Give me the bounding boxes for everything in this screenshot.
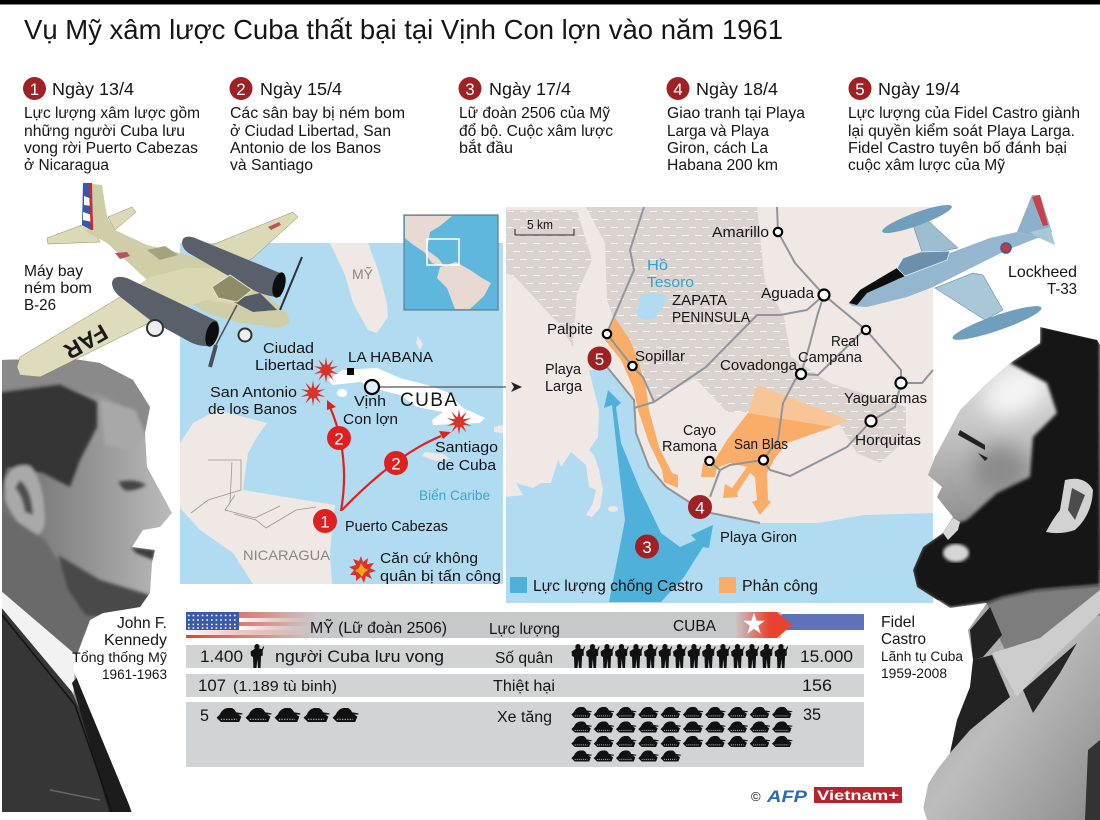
- step badges on map: 4: [695, 498, 705, 518]
- step 2: 2: [236, 80, 246, 99]
- row: losses: [186, 674, 864, 697]
- step 4: Habana 200 km: [667, 157, 778, 174]
- place labels: ZAPATA: [672, 292, 727, 309]
- row: tanks: Xe tăng: [497, 709, 552, 726]
- map legend: Lực lượng chống Castro: [533, 578, 703, 595]
- step 5: cuộc xâm lược của Mỹ: [848, 157, 1005, 174]
- step badges on map: [588, 346, 712, 558]
- caption: Castro: [881, 614, 963, 681]
- row: tanks: 35: [803, 705, 821, 724]
- step 2: và Santiago: [230, 157, 313, 174]
- step 1: Lực lượng xâm lược gồm: [24, 105, 200, 122]
- map labels: Santiago: [435, 439, 498, 456]
- arrow head to detail map: [511, 382, 522, 392]
- place labels: Playa Giron: [720, 529, 797, 546]
- caption: Kennedy: 1961-1963: [102, 667, 167, 682]
- step 1: vong rời Puerto Cabezas: [24, 140, 198, 157]
- step 1: Ngày 13/4: [52, 79, 134, 99]
- propellers: [280, 257, 302, 310]
- wheels: [147, 320, 163, 336]
- step 1: 1: [30, 80, 39, 99]
- map legend: [510, 577, 818, 595]
- caption: Castro: 1959-2008: [881, 666, 947, 681]
- row: troops: người Cuba lưu vong: [275, 647, 444, 666]
- neck: [987, 585, 1100, 650]
- Lake Tesoro: [637, 293, 667, 320]
- caption: Castro: Lãnh tụ Cuba: [881, 649, 963, 664]
- collar shadow: [950, 607, 1010, 753]
- map labels: Puerto Cabezas: [345, 518, 448, 535]
- plane label: B-26: B-26: [24, 297, 56, 314]
- map labels: Vịnh: [354, 393, 386, 410]
- place labels: Aguada: [761, 285, 815, 302]
- map labels: San Antonio: [210, 384, 297, 401]
- roundel: [1001, 243, 1011, 253]
- step 1: [23, 77, 200, 174]
- burst: Ciudad Libertad: [314, 357, 338, 383]
- burst: San Antonio: [301, 380, 325, 406]
- step badges on map: 5: [595, 350, 604, 369]
- place labels: Yaguaramas: [844, 390, 927, 407]
- header row: MỸ (Lữ đoàn 2506): [310, 617, 447, 637]
- timeline: five steps: [23, 77, 1080, 174]
- map labels: Libertad: [255, 357, 314, 374]
- caption: Kennedy: Tổng thống Mỹ: [72, 650, 167, 665]
- step 5: lại quyền kiểm soát Playa Larga.: [848, 123, 1075, 140]
- step 3: 3: [465, 80, 475, 99]
- tie: [72, 678, 132, 812]
- map labels: Con lợn: [343, 411, 398, 428]
- step 5: Lực lượng của Fidel Castro giành: [848, 105, 1080, 122]
- panel: detail map of Bay of Pigs: [506, 207, 933, 603]
- place labels: Tesoro: [647, 274, 694, 291]
- route badges: 2: [391, 454, 401, 474]
- credit: AFP and Vietnam+: [751, 787, 902, 806]
- head: [0, 355, 175, 815]
- step 2: Antonio de los Banos: [230, 140, 381, 157]
- row: troops: Số quân: [495, 650, 553, 667]
- row: losses: 107: [198, 676, 226, 695]
- map labels: NICARAGUA: [243, 547, 331, 563]
- town markers: [603, 228, 906, 465]
- caption: Kennedy: Kennedy: [104, 632, 167, 649]
- row: tanks: 5: [200, 706, 209, 725]
- portrait: Fidel Castro: [905, 325, 1100, 820]
- temple shadow: [100, 401, 146, 445]
- place labels: Sopillar: [635, 348, 685, 365]
- route badges: 1: [320, 512, 330, 532]
- row: troops: [186, 644, 864, 668]
- silver hair: [0, 355, 152, 436]
- header row: CUBA: [673, 618, 716, 635]
- US flag canton: [186, 612, 239, 630]
- portrait: John F. Kennedy: [0, 355, 175, 815]
- red attack routes: [330, 407, 441, 511]
- near wing: [935, 273, 1003, 320]
- fuselage: [849, 232, 1040, 307]
- Cuba island: [328, 368, 485, 425]
- caption: Kennedy: [72, 615, 167, 682]
- row: troops: 1.400: [200, 647, 243, 666]
- neck and jaw shadow: [14, 524, 96, 664]
- tail fin: [82, 183, 115, 232]
- row: losses: 156: [802, 676, 832, 695]
- place labels: Cayo: [683, 422, 716, 439]
- Central America land: [180, 410, 335, 584]
- step 5: [848, 77, 1080, 174]
- comparison table: [186, 612, 864, 767]
- canopy: [897, 251, 950, 276]
- far wing: [197, 212, 298, 267]
- eye and mouth shadows: [118, 481, 146, 490]
- collar: [992, 590, 1100, 697]
- step 2: [230, 77, 405, 174]
- Cuba flag: [781, 614, 864, 630]
- step 4: [666, 77, 805, 174]
- fuselage: [83, 230, 290, 328]
- connector to detail map: [379, 386, 512, 388]
- step 4: 4: [673, 80, 683, 99]
- place labels: Campana: [798, 349, 863, 366]
- burst: Santiago: [447, 409, 471, 435]
- cockpit: [212, 275, 252, 302]
- map labels: de los Banos: [208, 401, 297, 418]
- step 5: Ngày 19/4: [878, 79, 960, 99]
- place labels: Real: [831, 333, 859, 350]
- eye and brow: [958, 430, 988, 461]
- map labels: LA HABANA: [348, 349, 433, 366]
- step 1: ở Nicaragua: [24, 157, 109, 174]
- place labels: Covadonga: [720, 357, 798, 374]
- step 2: Ngày 15/4: [260, 79, 342, 99]
- legend: bombed airbase: Căn cứ không: [380, 550, 478, 567]
- map legend: Phản công: [742, 578, 818, 595]
- far tip tank: [880, 200, 954, 238]
- swamp areas: [506, 207, 906, 463]
- place labels: Horquitas: [855, 432, 921, 449]
- step 4: Giao tranh tại Playa: [667, 105, 805, 122]
- map labels: MỸ: [352, 266, 374, 282]
- near wing with FAR marking: [17, 293, 168, 377]
- near tip tank: [950, 301, 1044, 345]
- near wing with FAR marking: FAR: [59, 319, 112, 365]
- credit: AFP and Vietnam+: Vietnam+: [817, 787, 899, 803]
- face shading: [972, 356, 1055, 494]
- title: Vụ Mỹ xâm lược Cuba thất bại tại Vịnh Con lợn vào năm 1961: [24, 14, 783, 45]
- credit: AFP and Vietnam+: AFP: [766, 787, 808, 806]
- near engine: [112, 277, 219, 346]
- place labels: [545, 224, 927, 546]
- credit: AFP and Vietnam+: ©: [751, 789, 761, 804]
- nose: [849, 268, 905, 305]
- place labels: Palpite: [547, 321, 593, 338]
- scale bar: 5 km: [527, 218, 553, 232]
- face base: [905, 340, 1100, 600]
- step 3: [458, 77, 613, 157]
- road network: [607, 207, 933, 523]
- step 3: Ngày 17/4: [489, 79, 571, 99]
- step 1: những người Cuba lưu: [24, 123, 185, 140]
- tail fin: [1017, 195, 1052, 237]
- landing force arrow: [604, 390, 713, 602]
- inset locator map: [404, 215, 498, 310]
- map labels: Biển Caribe: [419, 487, 490, 503]
- ear: [5, 465, 45, 535]
- collar: [0, 590, 76, 700]
- map labels: [208, 266, 498, 563]
- Bay of Pigs marker: [365, 380, 379, 394]
- step 2: Các sân bay bị ném bom: [230, 105, 405, 122]
- hair, back of head and beard: [913, 325, 1100, 608]
- US flag stripes: [186, 612, 316, 638]
- icon: T-33 jet: [849, 195, 1055, 345]
- panel: regional map of the Caribbean: [180, 215, 512, 585]
- Florida: [330, 243, 388, 333]
- soldier icons: [572, 644, 788, 668]
- row: tanks: [186, 702, 864, 767]
- far engine: [182, 237, 284, 297]
- place labels: Amarillo: [712, 224, 769, 241]
- ear: [1046, 479, 1093, 533]
- place labels: Ramona: [662, 438, 718, 455]
- plane label: B-26: [24, 263, 92, 314]
- plane label: Lockheed T-33: Lockheed: [1008, 264, 1077, 281]
- shirt edge shadow: [1085, 740, 1100, 820]
- plane label: B-26: ném bom: [24, 280, 92, 297]
- step 4: Larga và Playa: [667, 123, 769, 140]
- caption: Castro: Fidel: [881, 614, 915, 631]
- dark hair: [0, 384, 97, 500]
- scale bar: [515, 218, 574, 235]
- stabilizers: [47, 225, 100, 244]
- center wing section: [127, 268, 250, 312]
- lip highlight: [943, 518, 960, 540]
- plane label: Lockheed T-33: [1008, 264, 1077, 298]
- place labels: Hồ: [647, 257, 668, 274]
- suit: [2, 608, 110, 812]
- map labels: CUBA: [400, 390, 460, 411]
- Havana marker: [347, 368, 354, 375]
- plane label: Lockheed T-33: T-33: [1047, 281, 1077, 298]
- step 4: Ngày 18/4: [696, 79, 778, 99]
- step 4: Giron, cách La: [667, 140, 768, 157]
- beard highlight: [943, 544, 969, 562]
- step 5: 5: [855, 80, 865, 99]
- icon: B-26 bomber: [17, 183, 302, 377]
- nose nacelle: [230, 293, 277, 312]
- header row: [186, 612, 864, 638]
- header row: Lực lượng: [489, 621, 560, 638]
- row: losses: Thiệt hại: [493, 678, 555, 695]
- row: losses: (1.189 tù binh): [233, 678, 337, 695]
- place labels: Larga: [545, 378, 583, 395]
- map labels: de Cuba: [437, 457, 497, 474]
- sea and bay: [506, 370, 933, 603]
- step 2: ở Ciudad Libertad, San: [230, 123, 391, 140]
- route badges: [313, 426, 408, 533]
- place labels: San Blas: [734, 436, 788, 453]
- step 3: bắt đầu: [459, 140, 513, 157]
- legend: bombed airbase: [349, 550, 501, 585]
- top black bar: [0, 0, 1100, 4]
- Jamaica and islands: [416, 336, 503, 461]
- caption: Castro: Castro: [881, 631, 926, 648]
- counter-attack arrows: [748, 385, 848, 427]
- legend: bombed airbase: quân bị tấn công: [380, 568, 501, 585]
- US tanks: [217, 708, 358, 722]
- fuselage marking: [115, 252, 130, 259]
- shirt: [920, 570, 1100, 820]
- caption: Kennedy: John F.: [117, 615, 167, 632]
- step 3: Lữ đoàn 2506 của Mỹ: [459, 105, 610, 122]
- step badges on map: 3: [642, 538, 652, 557]
- place labels: Playa: [545, 361, 582, 378]
- far wing: [912, 218, 958, 255]
- map labels: Ciudad: [263, 340, 314, 357]
- row: troops: 15.000: [800, 647, 853, 666]
- Cuba tanks: [571, 707, 792, 762]
- route badges: 2: [334, 430, 344, 448]
- step 3: đổ bộ. Cuộc xâm lược: [459, 123, 613, 140]
- step 5: Fidel Castro tuyên bố đánh bại: [848, 140, 1067, 157]
- plane label: B-26: Máy bay: [24, 263, 83, 280]
- place labels: PENINSULA: [672, 309, 750, 326]
